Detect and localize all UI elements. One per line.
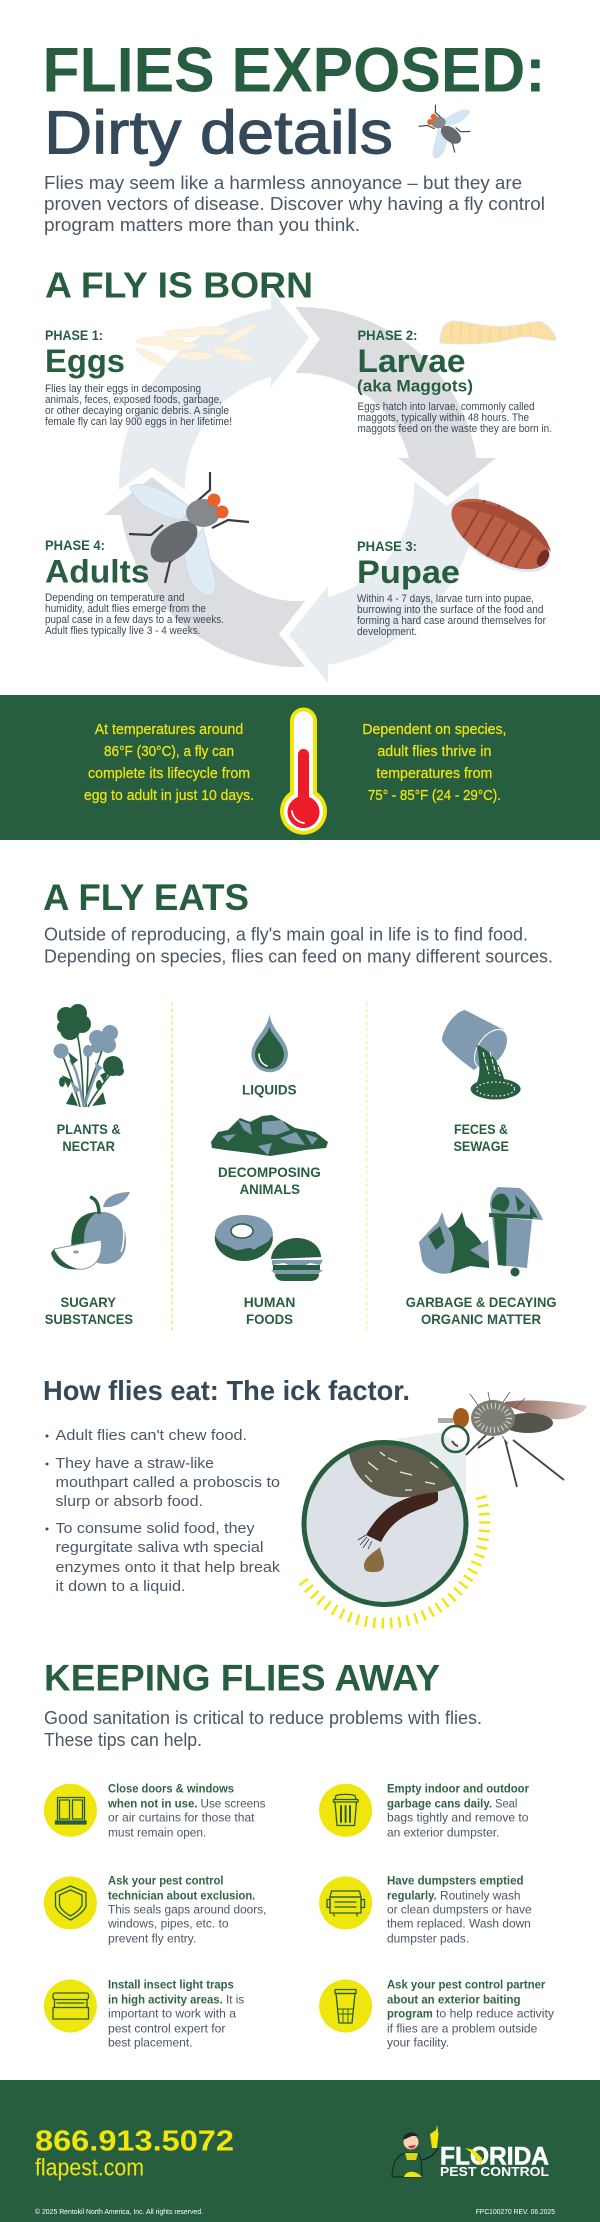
- phase 2 text: PHASE 2:: [358, 327, 418, 343]
- temperature text left: egg to adult in just 10 days.: [84, 788, 254, 804]
- intro text: proven vectors of disease. Discover why having a fly control: [44, 194, 545, 214]
- bullet list: [46, 1427, 281, 1595]
- heading: how flies eat: How flies eat: The ick factor.: [43, 1375, 410, 1406]
- tip: exclusion: Ask your pest control: [108, 1874, 224, 1888]
- tip: exterior baiting: about an exterior baiting: [387, 1993, 520, 2007]
- tip: insect light traps: important to work with a: [108, 2007, 236, 2021]
- tip: insect light traps: pest control expert for: [108, 2022, 225, 2036]
- bullet list: slurp or absorb food.: [56, 1493, 203, 1510]
- panel: temperature band: [0, 695, 600, 840]
- icon: eggs: [134, 322, 258, 369]
- temperature text right: temperatures from: [376, 766, 492, 782]
- icon: apple: [51, 1192, 130, 1269]
- phase 3 text: forming a hard case around themselves for: [357, 615, 546, 627]
- tip: dumpsters: them replaced. Wash down: [387, 1917, 531, 1931]
- phase 1 text: PHASE 1:: [45, 327, 103, 343]
- tip: garbage cans: an exterior dumpster.: [387, 1826, 499, 1840]
- eats intro text: Outside of reproducing, a fly's main goal in life is to find food.: [44, 925, 528, 945]
- tip: insect light traps: best placement.: [108, 2036, 192, 2050]
- heading: a fly eats: A FLY EATS: [43, 877, 249, 918]
- bullet list: enzymes onto it that help break: [56, 1559, 281, 1576]
- tip: exclusion: technician about exclusion.: [108, 1889, 255, 1903]
- title: FLIES EXPOSED:: [42, 36, 546, 106]
- title: Dirty details: [44, 98, 393, 166]
- icon: larva: [440, 321, 556, 344]
- phase 4 text: pupal case in a few days to a few weeks.: [45, 614, 224, 626]
- icon: liquid drop: [251, 1014, 288, 1072]
- phase 2 text: Larvae: [358, 343, 466, 379]
- tip: doors and windows: Close doors & windows: [108, 1782, 234, 1796]
- magnify beam: [396, 1432, 466, 1495]
- panel: footer: [0, 2080, 600, 2222]
- phase 1 text: [45, 327, 232, 428]
- label: liquids: LIQUIDS: [242, 1082, 297, 1098]
- icon: decomposing animals: [211, 1115, 328, 1156]
- temperature text right: Dependent on species,: [362, 722, 506, 738]
- document code: FPC100270 REV. 06.2025: [476, 2207, 555, 2216]
- label: plants and nectar: NECTAR: [62, 1138, 115, 1154]
- icon: tick marks: [303, 1496, 485, 1623]
- temperature text right: 75° - 85°F (24 - 29°C).: [368, 788, 501, 804]
- temperature text left: At temperatures around: [95, 722, 243, 738]
- phase 2 text: Eggs hatch into larvae, commonly called: [358, 401, 534, 413]
- phase 1 text: animals, feces, exposed foods, garbage,: [45, 394, 222, 406]
- phase 1 text: Eggs: [45, 343, 125, 379]
- label: sugary substances: SUBSTANCES: [45, 1311, 133, 1327]
- icon: small fly: [419, 105, 470, 158]
- tip: exterior baiting: [319, 1978, 555, 2050]
- tip: dumpsters: Routinely wash: [440, 1889, 520, 1903]
- phase 3 text: PHASE 3:: [357, 538, 417, 554]
- tip: exclusion: windows, pipes, etc. to: [107, 1917, 229, 1931]
- label: garbage and decaying organic matter: ORGANIC MATTER: [421, 1311, 541, 1327]
- phase 3 text: burrowing into the surface of the food and: [357, 604, 544, 616]
- phase 4 text: Adult flies typically live 3 - 4 weeks.: [45, 625, 200, 637]
- icon: garbage bags and can: [419, 1187, 543, 1276]
- temperature text right: [362, 722, 506, 804]
- label: human foods: HUMAN: [244, 1294, 295, 1310]
- phase 4 text: Depending on temperature and: [45, 592, 184, 604]
- phase 1 text: Flies lay their eggs in decomposing: [45, 383, 201, 395]
- tip: garbage cans: bags tightly and remove to: [387, 1811, 529, 1825]
- phase 4 text: Adults: [45, 554, 150, 590]
- phase 2 text: maggots, typically within 48 hours. The: [358, 412, 529, 424]
- magnified proboscis: [304, 1442, 466, 1604]
- footer phone number: 866.913.5072: [35, 2126, 234, 2158]
- logo: Florida Pest Control: [392, 2125, 549, 2179]
- temperature text left: complete its lifecycle from: [88, 766, 250, 782]
- tip: garbage cans: [319, 1782, 529, 1840]
- eats intro text: [44, 925, 553, 967]
- tip: insect light traps: Install insect light traps: [108, 1978, 234, 1992]
- icon: side-view fly: [438, 1392, 587, 1487]
- icon: thermometer: [280, 708, 327, 835]
- tip: garbage cans: Empty indoor and outdoor: [387, 1782, 529, 1796]
- eats intro text: Depending on species, flies can feed on many different sources.: [44, 947, 553, 967]
- tip: doors and windows: Use screens: [200, 1797, 266, 1811]
- keeping away intro text: Good sanitation is critical to reduce problems with flies.: [44, 1708, 482, 1728]
- copyright: © 2025 Rentokil North America, Inc. All rights reserved.: [35, 2207, 203, 2216]
- temperature text left: [84, 722, 254, 804]
- bullet list: regurgitate saliva wth special: [56, 1539, 264, 1556]
- label: feces and sewage: [454, 1121, 509, 1154]
- title: [42, 36, 546, 166]
- intro text: [44, 173, 545, 235]
- icon: adult fly: [129, 472, 249, 596]
- bullet list: mouthpart called a proboscis to: [56, 1474, 280, 1491]
- tip: doors and windows: when not in use.: [107, 1797, 198, 1811]
- logo: Florida Pest Control: PEST CONTROL: [440, 2165, 549, 2179]
- panel: life cycle arrows: [104, 290, 496, 683]
- icon: sewage pipe: [442, 1010, 521, 1100]
- phase 3 text: Pupae: [357, 554, 460, 590]
- temperature text left: 86°F (30°C), a fly can: [104, 744, 234, 760]
- icon: pupa: [440, 484, 562, 587]
- label: human foods: FOODS: [246, 1311, 293, 1327]
- label: decomposing animals: ANIMALS: [240, 1181, 300, 1197]
- label: decomposing animals: DECOMPOSING: [218, 1164, 321, 1180]
- tip: exterior baiting: program: [387, 2007, 433, 2021]
- label: garbage and decaying organic matter: [406, 1294, 557, 1327]
- keeping away intro text: These tips can help.: [44, 1730, 202, 1750]
- tip: doors and windows: or air curtains for those that: [108, 1811, 255, 1825]
- bullet list: Adult flies can't chew food.: [56, 1427, 247, 1444]
- phase 4 text: [45, 537, 224, 637]
- label: sugary substances: [45, 1294, 133, 1327]
- bullet list: it down to a liquid.: [56, 1578, 186, 1595]
- phase 2 text: (aka Maggots): [357, 376, 473, 396]
- keeping away intro text: [44, 1708, 482, 1750]
- label: plants and nectar: PLANTS &: [57, 1121, 121, 1137]
- intro text: program matters more than you think.: [44, 215, 360, 235]
- tip: dumpsters: regularly.: [387, 1889, 437, 1903]
- phase 3 text: Within 4 - 7 days, larvae turn into pupae,: [357, 593, 534, 605]
- tip: insect light traps: It is: [226, 1993, 244, 2007]
- phase 4 text: humidity, adult flies emerge from the: [45, 603, 206, 615]
- label: garbage and decaying organic matter: GARBAGE & DECAYING: [406, 1294, 557, 1310]
- phase 2 text: maggots feed on the waste they are born in.: [358, 423, 552, 435]
- tip: insect light traps: [44, 1978, 244, 2050]
- tip: exterior baiting: your facility.: [387, 2036, 449, 2050]
- temperature text right: adult flies thrive in: [377, 744, 491, 760]
- tip: exclusion: prevent fly entry.: [108, 1932, 196, 1946]
- tip: dumpsters: dumpster pads.: [387, 1932, 469, 1946]
- icon: human foods: [215, 1215, 323, 1281]
- intro text: Flies may seem like a harmless annoyance – but they are: [44, 173, 522, 193]
- tip: garbage cans: Seal: [495, 1797, 517, 1811]
- phase 3 text: development.: [357, 626, 417, 638]
- label: feces and sewage: FECES &: [454, 1121, 508, 1137]
- tip: dumpsters: or clean dumpsters or have: [387, 1903, 532, 1917]
- phase 2 text: [357, 327, 552, 435]
- logo: Florida Pest Control: FLORIDA: [440, 2142, 549, 2170]
- bullet list: To consume solid food, they: [56, 1520, 255, 1537]
- icon: plants and nectar: [54, 1004, 124, 1107]
- tip: insect light traps: in high activity areas.: [108, 1993, 223, 2007]
- label: feces and sewage: SEWAGE: [454, 1138, 509, 1154]
- tip: exclusion: This seals gaps around doors,: [108, 1903, 266, 1917]
- phase 4 text: PHASE 4:: [45, 537, 105, 553]
- label: human foods: [244, 1294, 295, 1327]
- footer website: flapest.com: [35, 2155, 144, 2182]
- tip: garbage cans: garbage cans daily.: [387, 1797, 492, 1811]
- label: plants and nectar: [57, 1121, 121, 1154]
- tip: doors and windows: [44, 1782, 266, 1840]
- phase 1 text: or other decaying organic debris. A single: [45, 405, 229, 417]
- tip: dumpsters: [319, 1874, 532, 1946]
- tip: doors and windows: must remain open.: [108, 1826, 206, 1840]
- tip: dumpsters: Have dumpsters emptied: [387, 1874, 524, 1888]
- phase 1 text: female fly can lay 900 eggs in her lifetime!: [45, 416, 232, 428]
- bullet list: They have a straw-like: [56, 1455, 214, 1472]
- tip: exterior baiting: to help reduce activity: [436, 2007, 555, 2021]
- phase 3 text: [357, 538, 546, 638]
- heading: keeping flies away: KEEPING FLIES AWAY: [44, 1658, 440, 1699]
- label: decomposing animals: [218, 1164, 321, 1197]
- tip: exterior baiting: if flies are a problem outside: [387, 2022, 538, 2036]
- heading: a fly is born: A FLY IS BORN: [45, 264, 313, 306]
- tip: exclusion: [44, 1874, 266, 1946]
- tip: exterior baiting: Ask your pest control partner: [387, 1978, 546, 1992]
- label: sugary substances: SUGARY: [60, 1294, 117, 1310]
